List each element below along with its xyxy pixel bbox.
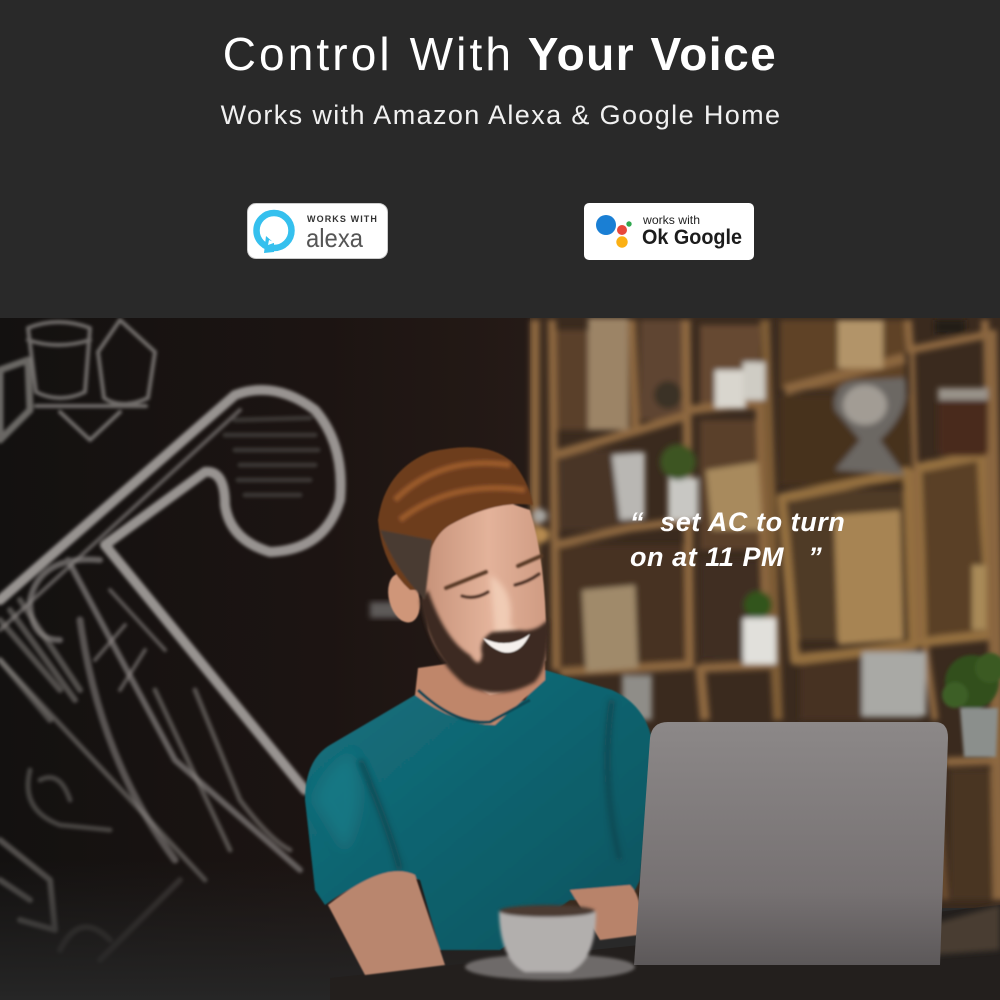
badge text: ok google: Ok Google	[642, 226, 742, 249]
blurred sign on wall	[370, 602, 405, 618]
badge text: works with: works with	[642, 213, 700, 227]
beard	[420, 590, 549, 693]
shelf interiors	[552, 330, 632, 430]
badge text: alexa: alexa	[306, 223, 363, 253]
chalk drawing	[0, 320, 341, 960]
wooden shelves background	[530, 318, 1000, 908]
icon: alexa ring	[256, 213, 292, 253]
bottom-left floor fade	[0, 860, 540, 1000]
badge text: works with: WORKS WITH	[307, 214, 378, 224]
voice command quote: “ set AC to turn on at 11 PM ”	[630, 507, 845, 572]
badge: works with ok google	[584, 203, 754, 260]
t-shirt	[305, 670, 652, 950]
coffee cup	[465, 905, 635, 980]
photo: man at laptop in cafe	[0, 318, 1000, 1000]
chalkboard wall	[0, 318, 535, 1000]
title: Control With Your Voice	[223, 28, 777, 80]
man	[305, 447, 652, 975]
face	[418, 500, 546, 695]
table	[330, 905, 1000, 1000]
subtitle: Works with Amazon Alexa & Google Home	[221, 100, 781, 130]
shelf objects	[588, 318, 628, 430]
ear	[383, 570, 425, 626]
plant in pot	[942, 653, 1000, 757]
laptop	[634, 722, 948, 965]
neck	[415, 650, 545, 725]
arm	[328, 871, 445, 975]
wood frames	[535, 320, 1000, 900]
icon: google assistant dots	[596, 215, 632, 248]
smile	[483, 634, 530, 653]
hair	[378, 447, 533, 590]
badge: works with alexa	[247, 203, 388, 259]
